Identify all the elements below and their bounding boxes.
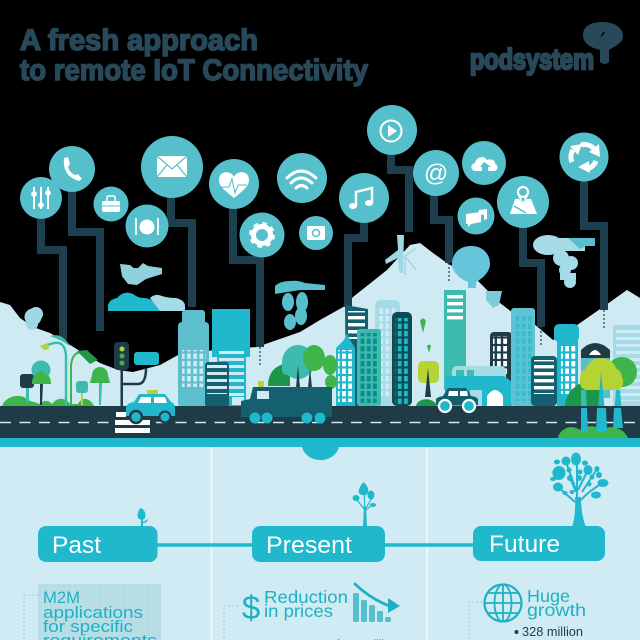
- right world-map cloud: [533, 235, 585, 288]
- building: big green striped: [444, 290, 466, 390]
- building: dark windows: [392, 312, 412, 406]
- teal cloud: [108, 293, 160, 311]
- plane-shaped cloud: [120, 263, 162, 285]
- pale decorative clouds and shapes in the sky: [24, 235, 595, 330]
- building: station: [445, 366, 512, 407]
- reduction heading: in prices: [264, 601, 333, 621]
- vehicle: taxi: [126, 390, 175, 423]
- label: Past: [38, 526, 158, 562]
- street lamp tall: [40, 335, 70, 405]
- icon: camera: [299, 216, 333, 250]
- small cloud near balloon: [486, 291, 502, 308]
- icon: at sign: [413, 150, 459, 196]
- small square tree: [76, 381, 88, 405]
- logo: podsystem: [470, 22, 623, 76]
- growth heading: Huge: [527, 586, 570, 606]
- panel: reduction in prices: [224, 584, 400, 640]
- big trees ground bush: [558, 426, 628, 438]
- label: Present: [252, 526, 385, 562]
- small tree icon: [352, 482, 376, 526]
- growth bullet: 328 million: [522, 625, 583, 639]
- building: cyan mushroom tower: [554, 324, 579, 406]
- reduction heading: Reduction: [264, 587, 348, 607]
- growth heading: [527, 586, 586, 620]
- hills background: [0, 243, 640, 410]
- street lamp green: [71, 350, 98, 405]
- round green tree: [90, 367, 110, 405]
- icon: play button: [367, 105, 417, 155]
- title: [20, 24, 368, 87]
- panel: M2M applications: for specific: [43, 617, 134, 636]
- title: to remote IoT Connectivity: [20, 54, 368, 87]
- left bushes: [2, 396, 94, 406]
- icon: dollar sign: $: [242, 589, 260, 626]
- logo: podsystem: podsystem: [470, 44, 594, 76]
- label: Present: Present: [266, 532, 352, 559]
- panel: huge growth: [469, 584, 586, 640]
- pale cloud: [150, 295, 185, 311]
- building: arch top: [581, 343, 610, 398]
- bar chart falling: [353, 593, 391, 622]
- tree-shaped cloud: [275, 281, 325, 330]
- small hill cloud: [24, 307, 43, 330]
- right trees beside station: [416, 318, 439, 406]
- icon: wifi: [277, 153, 327, 203]
- icon: briefcase: [94, 186, 128, 222]
- panel: M2M applications: [24, 584, 161, 640]
- connector lines from icons to the city: [41, 152, 604, 347]
- growth heading: growth: [527, 600, 586, 620]
- reduction heading: [264, 587, 348, 621]
- vehicle: car: [436, 388, 478, 412]
- timeline connector: [157, 543, 474, 547]
- left tree: [32, 360, 51, 405]
- icon: plate and cutlery: [126, 204, 168, 248]
- large tree icon: [550, 452, 608, 527]
- building: sky blue tower: [511, 308, 535, 406]
- icon: map pin: [497, 176, 549, 228]
- panel: M2M applications: applications: [43, 603, 143, 622]
- icon: at sign: @: [424, 160, 448, 187]
- label: Past: Past: [52, 532, 101, 559]
- icon: chat bubbles: [458, 198, 494, 234]
- icon: sliders: [20, 177, 62, 219]
- building: pale tower: [375, 300, 400, 406]
- trees and street furniture: [2, 318, 637, 432]
- title: A fresh approach: [20, 24, 258, 57]
- trees behind truck: [268, 345, 337, 389]
- panel: timeline background: [0, 447, 640, 640]
- building: cyan block: [212, 309, 250, 406]
- left dark square tree: [20, 374, 34, 402]
- city buildings: [178, 290, 640, 407]
- label: Future: Future: [489, 531, 560, 558]
- wind turbine: [385, 235, 416, 275]
- building: dark teal block: [531, 356, 557, 406]
- icon: music note: [339, 173, 389, 223]
- label: Future: [473, 526, 605, 561]
- traffic light: [114, 342, 159, 410]
- teal band: [0, 438, 640, 447]
- balloon: [452, 246, 490, 288]
- building: dark with windows: [490, 332, 512, 392]
- building: pale stripes right: [613, 325, 640, 406]
- icon: cloud: [462, 141, 506, 185]
- vehicle: truck: [241, 381, 332, 424]
- building: tall blue tower: [178, 310, 209, 407]
- icon: recycle arrows: [560, 132, 608, 182]
- icon: phone: [49, 146, 95, 192]
- trunks over road: [581, 408, 623, 432]
- building: green tower: [357, 329, 381, 406]
- road: [0, 406, 640, 438]
- half circle tab: [302, 447, 339, 460]
- icon: envelope: [141, 136, 203, 198]
- dotted connector ends: [260, 263, 604, 366]
- road dashes: [0, 422, 640, 424]
- big trees right: [565, 357, 637, 432]
- crosswalk: [115, 412, 150, 433]
- panel: M2M applications: M2M: [43, 588, 80, 607]
- column separators: [212, 447, 427, 640]
- building: dark teal stripes: [345, 305, 368, 406]
- icon: globe: [484, 584, 522, 622]
- arrow down: [355, 584, 400, 613]
- sprout icon: [138, 508, 148, 526]
- icon: gear: [240, 212, 284, 258]
- building: dark striped: [205, 362, 229, 407]
- building: small blue tower: [336, 333, 355, 406]
- icon: heart rate: [209, 159, 259, 209]
